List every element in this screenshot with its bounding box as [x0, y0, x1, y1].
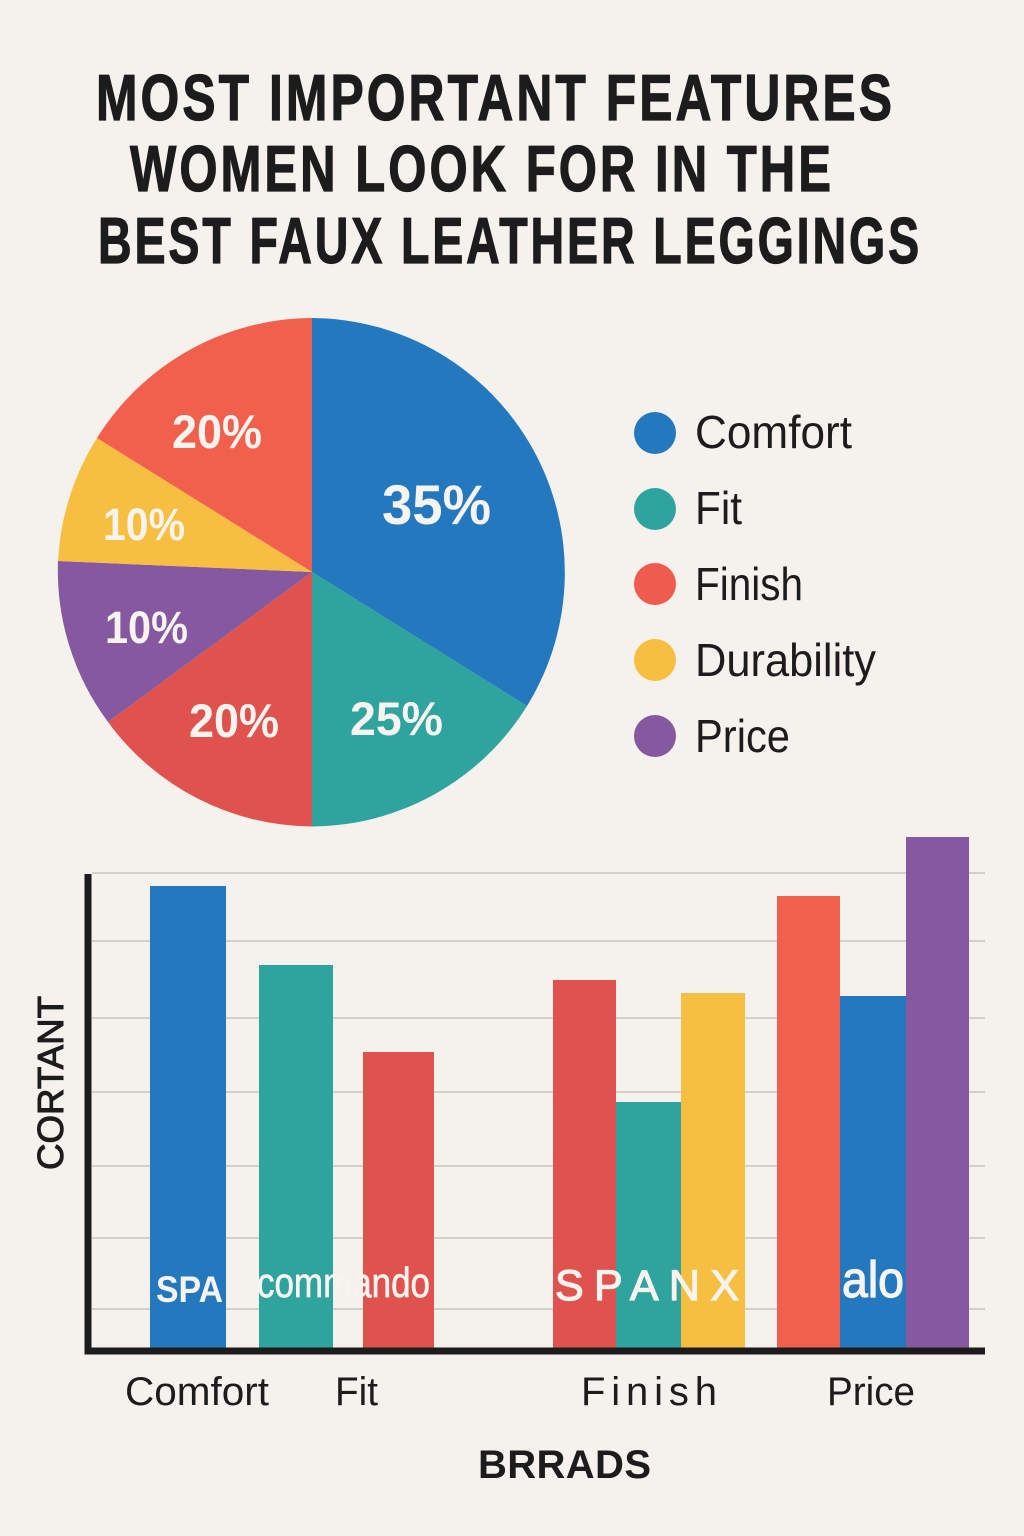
bar chart: [30, 837, 985, 1487]
pie slice: purple 10%: [58, 561, 312, 722]
pie percentage labels: 10%: [103, 499, 185, 550]
legend item: finish: Finish: [695, 558, 803, 610]
pie slice: yellow 10%: [58, 438, 312, 572]
y-axis label: CORTANT: [30, 996, 71, 1170]
brand label: commando: commando: [257, 1259, 430, 1306]
pie percentage labels: 20%: [172, 405, 262, 458]
pie slice: coral 20%: [97, 318, 312, 572]
legend item: fit: Fit: [695, 482, 742, 534]
bar group: price coral: [777, 896, 840, 1348]
legend item: fit: [634, 482, 742, 534]
pie slice: red 20%: [108, 572, 312, 826]
x-axis category labels: Fit: [335, 1370, 378, 1414]
bar group: finish teal: [616, 1102, 681, 1348]
x-axis title: BRRADS: [478, 1443, 651, 1487]
legend item: price: Price: [695, 710, 790, 762]
pie percentage labels: 35%: [382, 473, 491, 536]
pie percentage labels: 25%: [350, 692, 443, 745]
bar group: fit red: [363, 1052, 434, 1348]
bar group: comfort: [150, 886, 226, 1348]
pie percentage labels: 10%: [105, 602, 188, 653]
bar group: price blue: [840, 996, 906, 1348]
brand label: SPA: SPA: [156, 1269, 223, 1310]
legend item: comfort: Comfort: [695, 406, 852, 458]
x-axis category labels: [125, 1370, 915, 1414]
bar group: price purple: [906, 837, 969, 1348]
x-axis category labels: Finish: [581, 1370, 717, 1414]
legend: [634, 406, 876, 762]
bar group: finish yellow: [681, 993, 745, 1348]
legend item: finish: [634, 558, 803, 610]
pie percentage labels: 20%: [189, 694, 279, 747]
axes: [88, 874, 985, 1351]
brand label: alo: alo: [842, 1251, 904, 1308]
pie chart: [58, 318, 565, 826]
pie slice: fit 25%: [312, 572, 527, 826]
bar group: finish red: [553, 980, 616, 1348]
title: [96, 61, 922, 277]
brand label: SPANX: SPANX: [555, 1262, 739, 1310]
bar group: fit teal: [259, 965, 333, 1348]
legend item: comfort: [634, 406, 852, 458]
pie slice: comfort 35%: [312, 318, 565, 706]
legend item: durability: Durability: [695, 634, 876, 686]
legend item: price: [634, 710, 790, 762]
x-axis category labels: Comfort: [125, 1370, 269, 1414]
pie percentage labels: [103, 405, 491, 747]
x-axis category labels: Price: [827, 1370, 915, 1414]
